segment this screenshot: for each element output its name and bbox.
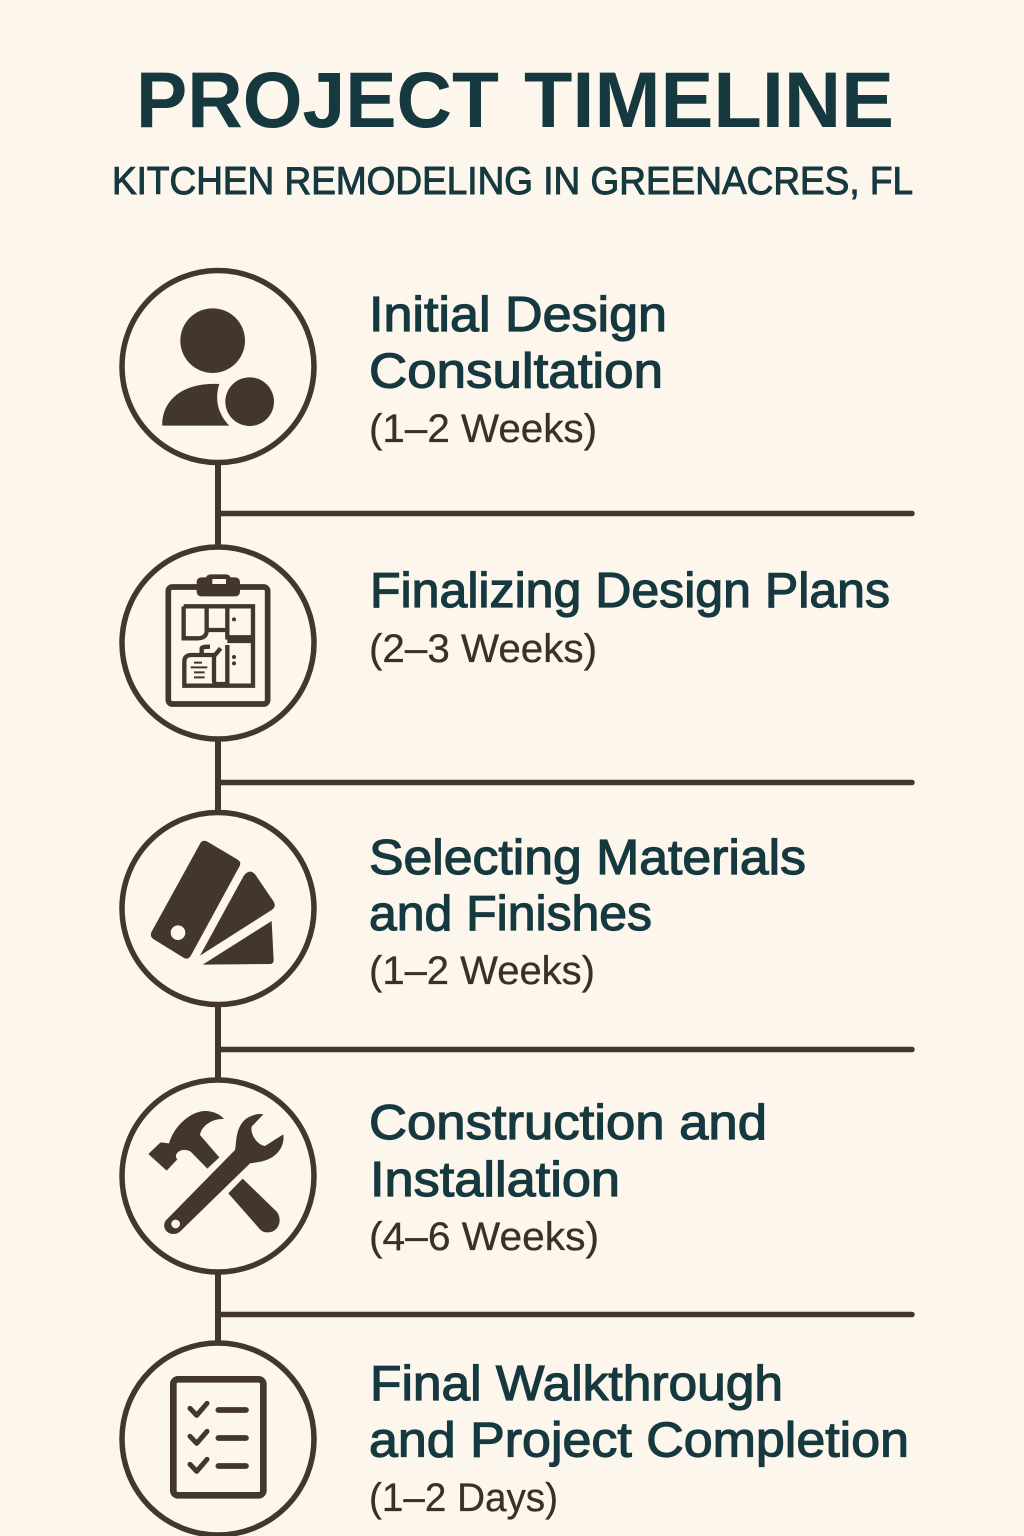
title xyxy=(136,55,894,144)
duration: (1–2 Weeks) xyxy=(369,407,597,451)
title: TIMELINE xyxy=(524,55,894,144)
icon: checklist in circle xyxy=(122,1343,314,1535)
icon: people in circle xyxy=(122,270,314,462)
heading line 2: and Finishes xyxy=(369,887,652,941)
step 4: construction and installation xyxy=(122,1080,767,1272)
heading: Selecting Materials xyxy=(369,831,806,885)
icon: swatch fan in circle xyxy=(122,812,314,1004)
step 2: finalizing design plans xyxy=(122,547,890,739)
step 3: selecting materials and finishes xyxy=(122,812,806,1004)
title: PROJECT xyxy=(136,55,499,144)
heading line 2: Consultation xyxy=(369,344,663,398)
heading: Finalizing Design Plans xyxy=(370,564,890,618)
duration: (2–3 Weeks) xyxy=(369,627,597,671)
duration: (4–6 Weeks) xyxy=(369,1215,599,1259)
duration: (1–2 Days) xyxy=(369,1476,558,1520)
heading line 2: and Project Completion xyxy=(369,1414,909,1468)
timeline connector lines xyxy=(218,460,912,1344)
step 5: final walkthrough and project completion xyxy=(122,1343,909,1535)
heading: Construction and xyxy=(369,1096,767,1150)
heading line 2: Installation xyxy=(370,1153,620,1207)
icon: hammer and wrench in circle xyxy=(122,1080,314,1272)
heading: Initial Design xyxy=(369,288,667,342)
subtitle: KITCHEN REMODELING IN GREENACRES, FL xyxy=(112,160,913,203)
step 1: initial design consultation xyxy=(122,270,667,462)
duration: (1–2 Weeks) xyxy=(369,949,595,993)
icon: clipboard floor plan in circle xyxy=(122,547,314,739)
heading: Final Walkthrough xyxy=(370,1357,783,1411)
